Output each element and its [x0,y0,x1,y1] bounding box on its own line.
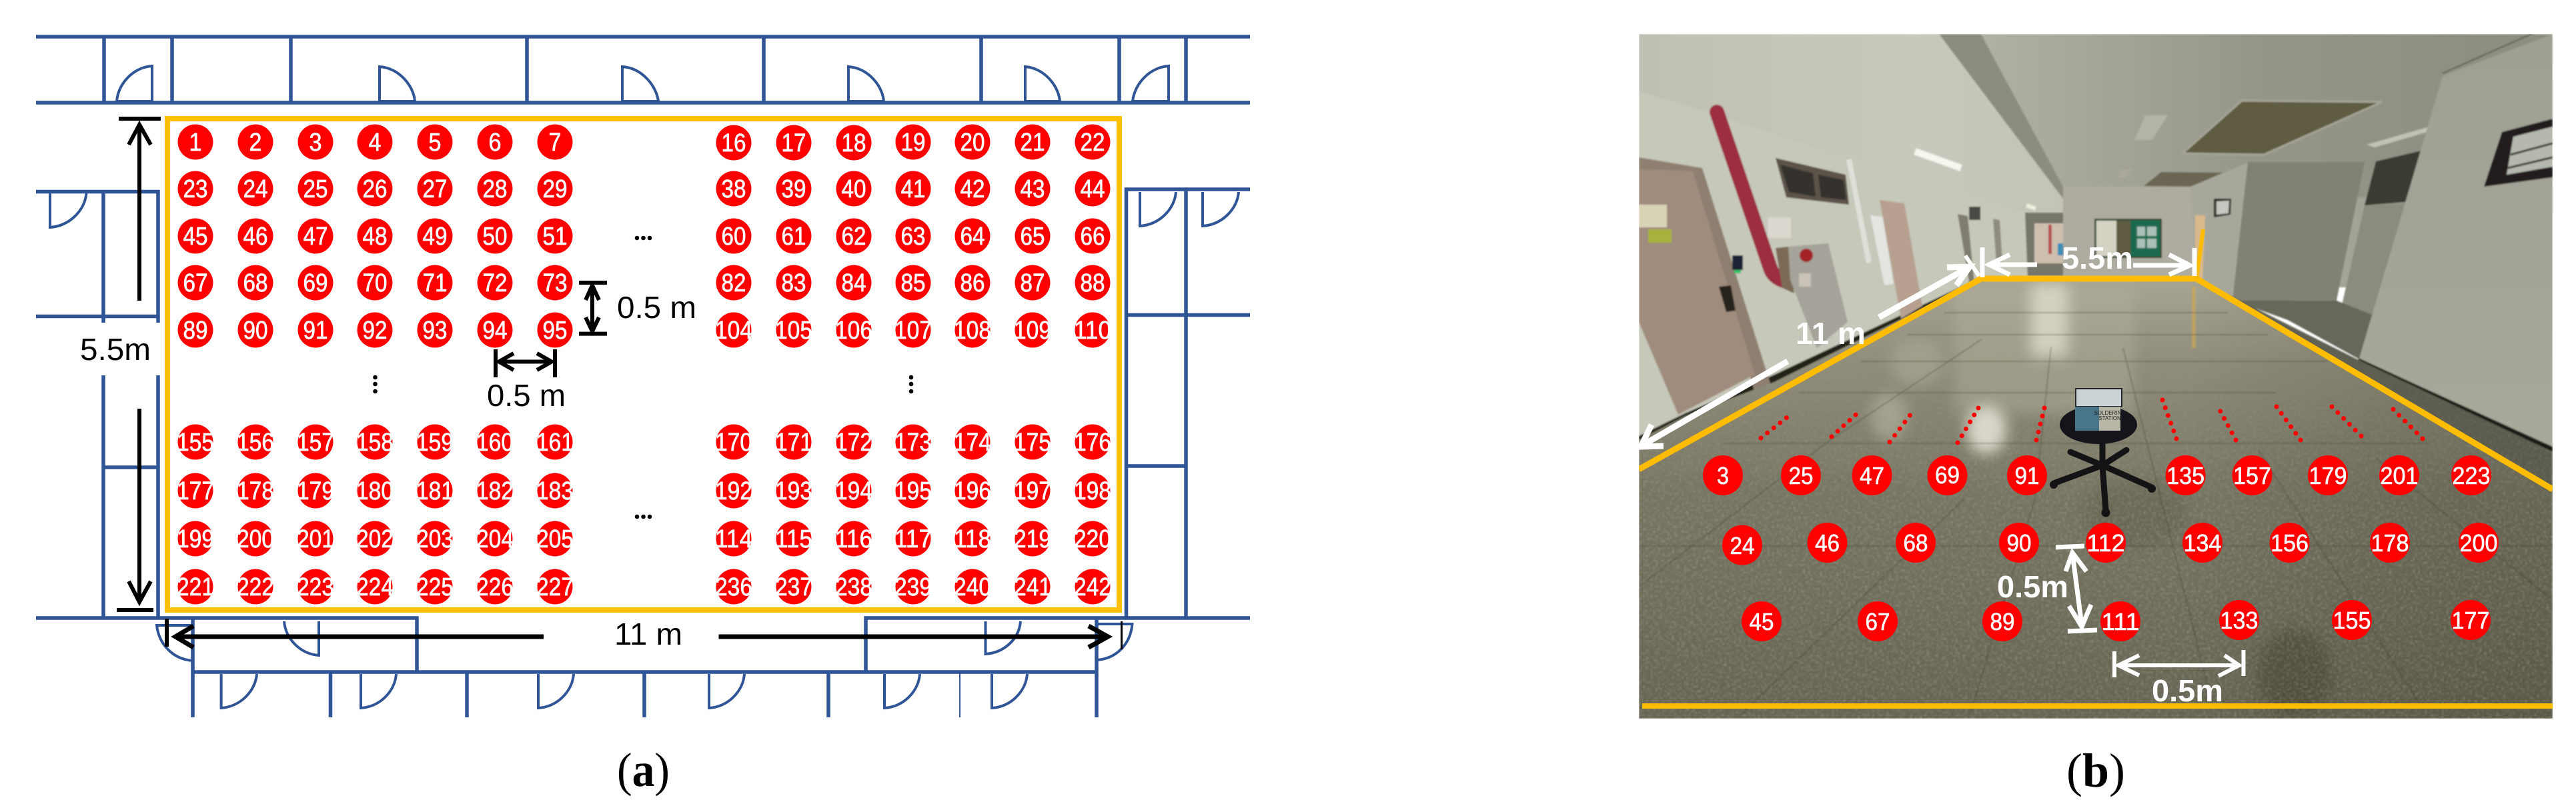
row 1 points: 3 [309,129,321,157]
row 4 points: 72 [483,269,507,297]
row 4 points: 73 [543,269,567,297]
row 2 points: 43 [1021,175,1045,203]
row 4 points: 83 [782,269,806,297]
row 6 points: 174 [954,429,991,457]
photo measurement points: 25 [1789,462,1813,489]
row 7 points: 179 [297,477,334,505]
wall panel dark sign [1969,207,1980,220]
silver hydrant box [1776,243,1848,348]
red pipe [1717,112,1790,282]
right big wall [2359,34,2553,453]
row 9 points: 242 [1074,573,1111,601]
arrow: 0.5 m vertical spacing [579,283,607,334]
label: 0.5m horizontal: 0.5m [2152,673,2223,708]
measurement points grid [177,124,1111,604]
ceiling beam [1939,34,2063,199]
far doors [1958,214,1974,285]
floor [1639,278,2553,719]
row 2 points: 24 [243,175,268,203]
row 5 points: 109 [1014,317,1051,345]
row 9 points: 225 [416,573,454,601]
side opening [2195,215,2205,284]
row 7 points: 180 [356,477,394,505]
alcove side wall [2190,163,2248,300]
row 7 points: 178 [237,477,274,505]
row 5 points: 94 [483,317,507,345]
row 5 points [177,312,1111,348]
row 7 points: 193 [775,477,812,505]
photo measurement points: 157 [2233,462,2271,489]
row 5 points: 105 [775,317,812,345]
door symbols [50,66,1239,708]
row 9 points: 238 [835,573,872,601]
row 2 points: 27 [423,175,447,203]
row 6 points: 158 [356,429,394,457]
row 5 points: 108 [954,317,991,345]
row 3 points: 60 [722,223,746,251]
row 4 points: 82 [722,269,746,297]
left wall [1639,156,2028,437]
row 7 points [177,473,1111,508]
row 4 points [177,265,1110,300]
row 9 points: 227 [536,573,574,601]
arrow: 0.5 m vertical [2056,546,2097,631]
label: 11 m: 11 m [1796,316,1866,351]
row 1 points: 4 [368,129,382,157]
row 5 points: 107 [894,317,932,345]
arrow: 11 m length [1641,256,1979,447]
row 3 points [177,219,1110,253]
row 4 points: 71 [423,269,447,297]
row 9 points: 237 [775,573,812,601]
middle door [1880,200,1922,319]
row 8 points: 117 [894,525,932,553]
row 7 points: 177 [177,477,214,505]
row 5 points: 91 [303,317,328,345]
label: 0.5 m horizontal: 0.5 m [487,378,566,413]
arrow: 5.5 m height dimension [117,119,161,610]
center block wall [2232,162,2365,301]
row 8 points: 204 [476,525,514,553]
row 5 points: 104 [715,317,752,345]
white conduit [1849,159,1869,263]
left baseboard [1639,277,1984,443]
row 5 points: 95 [543,317,567,345]
row 8 points: 115 [775,525,812,553]
ceiling right of beam [1981,34,2453,197]
right ceiling panels [2117,101,2382,187]
row 9 points [177,569,1111,604]
row 7 points: 198 [1074,477,1111,505]
row 3 points: 46 [243,223,268,251]
right door [2341,203,2405,315]
row 2 points: 40 [842,175,866,203]
row 3 points: 48 [363,223,387,251]
row 1 points: 1 [189,129,201,157]
chair with laptop: SOLDERING [2094,410,2126,416]
row 5 points: 106 [835,317,872,345]
right baseboard [2359,358,2553,463]
photo measurement points: 46 [1815,529,1840,557]
row 4 points: 84 [842,269,866,297]
row 3 points: 49 [423,223,447,251]
photo measurement points: 45 [1749,608,1774,635]
floor glare [1870,283,2331,717]
photo measurement points: 223 [2452,462,2491,489]
arrow: 5.5 m width [1982,247,2194,277]
row 8 points: 219 [1014,525,1051,553]
row 6 points: 176 [1074,429,1111,457]
photo measurement points: 179 [2309,462,2347,489]
ceiling lights [1915,151,2036,209]
row 4 points: 85 [900,269,926,297]
photo measurement points: 91 [2014,462,2040,489]
row 7 points: 183 [536,477,574,505]
row 2 points: 25 [303,175,328,203]
shutter [2365,151,2421,205]
row 8 points: 205 [536,525,574,553]
row 8 points [177,521,1111,556]
floor behind right [2232,300,2374,361]
row 4 points: 87 [1021,269,1045,297]
panel: floor plan (a) [36,37,1250,797]
row 1 points: 20 [960,129,985,157]
right wall crease [2443,34,2531,73]
photo measurement points [1703,455,2499,641]
row 6 points: 172 [835,429,872,457]
photo measurement points: 112 [2086,529,2125,557]
row 4 points: 67 [183,269,208,297]
row 7 points: 181 [416,477,454,505]
row 9 points: 236 [715,573,752,601]
row 1 points: 6 [488,129,502,157]
row 4 points: 68 [243,269,268,297]
row 3 points: 64 [960,223,985,251]
row 6 points: 157 [297,429,334,457]
label: 11 m: 11 m [614,617,682,651]
row 1 points: 21 [1021,129,1045,157]
row 1 points: 16 [722,129,746,157]
row 3 points: 63 [900,223,926,251]
arrow: 0.5 m horizontal [2114,650,2244,677]
photo measurement points: 156 [2271,529,2309,557]
row 9 points: 221 [177,573,214,601]
row 9 points: 226 [476,573,514,601]
far wall [2063,187,2196,280]
far left door [1639,157,1771,415]
row 9 points: 223 [297,573,334,601]
row 1 points: 5 [428,129,442,157]
row 9 points: 222 [237,573,274,601]
label: 5.5m: 5.5m [80,332,151,367]
photo measurement points: 67 [1865,608,1890,635]
row 6 points: 175 [1014,429,1051,457]
row 2 points: 39 [782,175,806,203]
row 9 points: 241 [1014,573,1051,601]
row 7 points: 197 [1014,477,1051,505]
row 3 points: 51 [543,223,567,251]
dotted red lines for continuing points [1761,400,2423,443]
small window [2214,199,2231,217]
photo measurement points: 178 [2371,529,2409,557]
row 2 points: 26 [363,175,387,203]
row 8 points: 220 [1074,525,1111,553]
row 1 points: 18 [842,129,866,157]
floor plan walls [36,37,1250,717]
ceiling [1639,34,2406,288]
row 6 points: 155 [177,429,214,457]
row 6 points: 170 [715,429,752,457]
row 1 points: 22 [1081,129,1105,157]
photo measurement points: 111 [2101,608,2140,635]
tile lines [1639,313,2553,715]
yellow area boundary lines [1639,229,2553,706]
row 5 points: 110 [1074,317,1111,345]
wall window [1776,158,1849,205]
row 1 points: 7 [548,129,562,157]
row 3 points: 62 [842,223,866,251]
photo measurement points: 177 [2452,607,2489,634]
right white strip [2367,127,2427,147]
photo illustration of corridor [1639,34,2553,719]
row 2 points: 29 [543,175,567,203]
photo measurement points: 135 [2166,462,2204,489]
row 2 points: 38 [722,175,746,203]
photo measurement points: 201 [2380,462,2419,489]
row 2 points: 42 [960,175,985,203]
row 6 points: 159 [416,429,454,457]
row 8 points: 200 [237,525,274,553]
photo measurement points: 68 [1904,529,1928,557]
photo measurement points: 90 [2006,529,2032,557]
row 3 points: 50 [483,223,507,251]
row 3 points: 65 [1021,223,1045,251]
label: 0.5 m vertical: 0.5 m [617,290,696,325]
photo measurement points: 89 [1990,608,2014,635]
chair with laptop: STATION [2098,415,2121,421]
row 9 points: 224 [356,573,394,601]
row 5 points: 90 [243,317,268,345]
label: 0.5m vertical: 0.5m [1997,569,2068,604]
row 6 points: 161 [536,429,574,457]
row 6 points: 171 [775,429,812,457]
row 9 points: 239 [894,573,932,601]
row 3 points: 47 [303,223,328,251]
chair with laptop [2050,389,2156,517]
row 6 points: 156 [237,429,274,457]
photo measurement points: 133 [2220,607,2259,634]
notice board [2095,219,2161,257]
row 4 points: 70 [363,269,387,297]
gate reflection [2192,287,2196,348]
caption (a): (a) [617,743,670,797]
row 8 points: 114 [715,525,752,553]
row 2 points: 28 [483,175,507,203]
row 3 points: 45 [183,223,208,251]
yellow measurement area boundary [167,119,1119,610]
photo measurement points: 3 [1717,462,1729,489]
right wall window [2484,119,2553,187]
row 2 points: 23 [183,175,208,203]
row 3 points: 61 [782,223,806,251]
row 4 points: 69 [303,269,328,297]
caption (b): (b) [2066,744,2125,797]
row 1 points: 19 [900,129,926,157]
row 7 points: 196 [954,477,991,505]
arrow: 11 m width dimension [167,619,1122,649]
ellipsis dots between grid groups [373,236,913,519]
row 8 points: 202 [356,525,394,553]
row 6 points [177,424,1111,460]
row 8 points: 201 [297,525,334,553]
photo measurement points: 155 [2333,607,2371,634]
row 8 points: 118 [954,525,991,553]
photo measurement points: 134 [2184,529,2221,557]
poster on wall [1870,215,1894,285]
row 8 points: 116 [835,525,872,553]
wall poster [1768,217,1791,238]
row 9 points: 240 [954,573,991,601]
photo measurement points: 69 [1935,461,1960,489]
row 7 points: 194 [835,477,872,505]
row 2 points [177,171,1110,207]
photo measurement points: 24 [1730,532,1754,559]
photo measurement points: 200 [2460,529,2497,557]
row 7 points: 192 [715,477,752,505]
far corridor opening [2025,213,2063,276]
row 1 points: 17 [782,129,806,157]
row 7 points: 195 [894,477,932,505]
row 2 points: 44 [1081,175,1105,203]
photo measurement points: 47 [1860,462,1884,489]
row 1 points: 2 [249,129,261,157]
row 6 points: 173 [894,429,932,457]
row 3 points: 66 [1081,223,1105,251]
row 5 points: 92 [363,317,387,345]
row 8 points: 199 [177,525,214,553]
row 2 points: 41 [900,175,926,203]
row 5 points: 93 [423,317,447,345]
panel: corridor photo (b) [1639,34,2553,797]
row 1 points [177,124,1110,160]
arrow: 0.5 m horizontal spacing [496,349,555,377]
row 8 points: 203 [416,525,454,553]
row 7 points: 182 [476,477,514,505]
row 4 points: 86 [960,269,985,297]
label: 5.5m: 5.5m [2062,241,2133,275]
row 4 points: 88 [1081,269,1105,297]
row 6 points: 160 [476,429,514,457]
floor texture [1639,320,2553,719]
row 5 points: 89 [183,317,208,345]
